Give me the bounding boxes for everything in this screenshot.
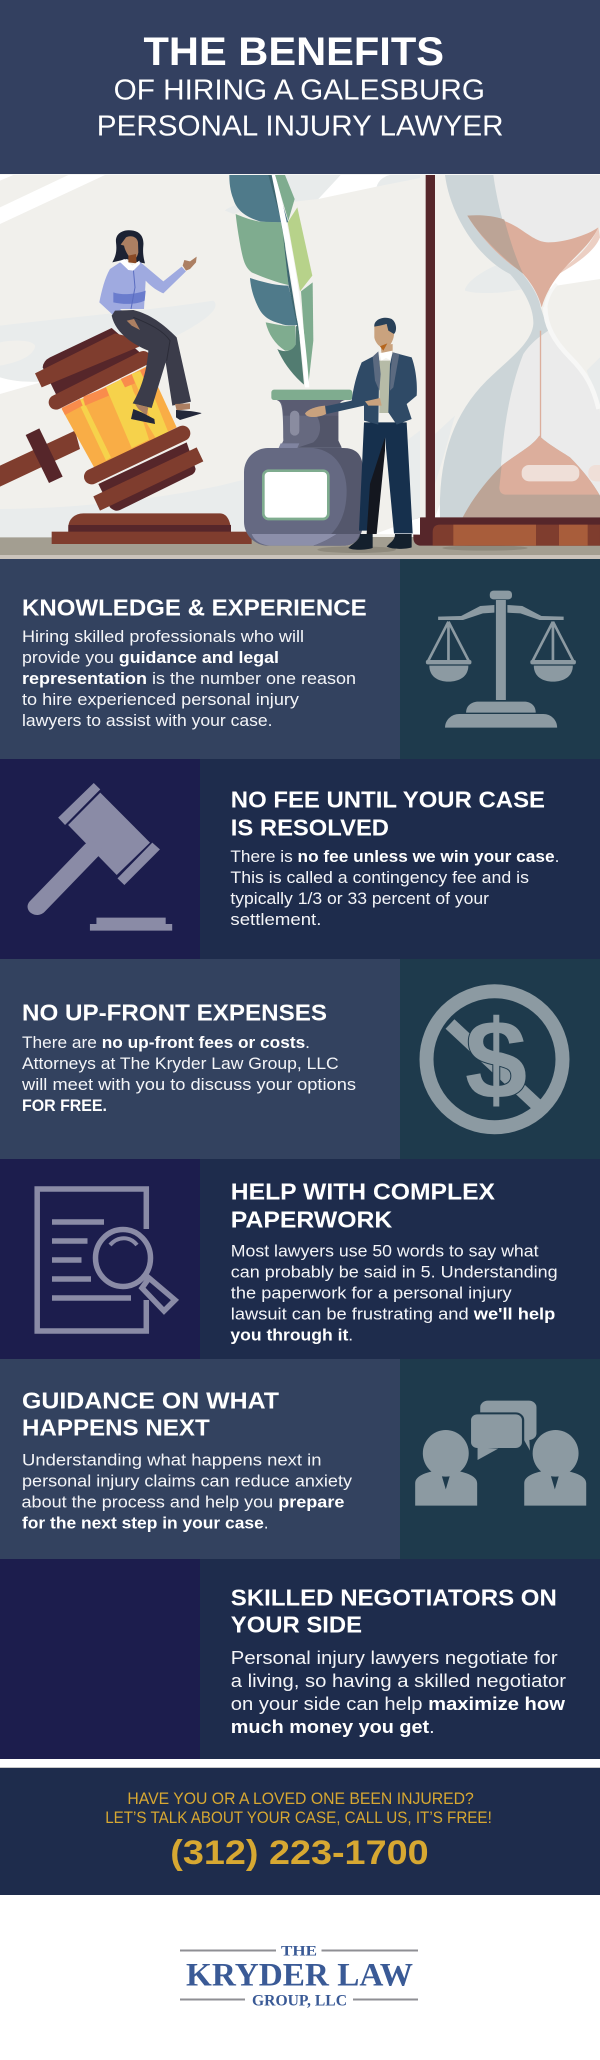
icon: document with magnifier (37, 1189, 175, 1331)
call to action text: LET’S TALK ABOUT YOUR CASE, CALL US, IT’S FREE! (105, 1808, 492, 1827)
background shapes behind feather (220, 175, 420, 537)
hero illustration (0, 174, 600, 559)
body text: for the next step in your case . (22, 1514, 269, 1532)
logo: The Kryder Law Group (180, 1944, 418, 2009)
call to action band (0, 1767, 600, 1895)
body text: Understanding what happens next in (22, 1451, 322, 1469)
feather quill (229, 175, 313, 387)
title: THE BENEFITS (144, 30, 444, 74)
ground (0, 537, 600, 559)
body text: about the process and help you prepare (22, 1493, 344, 1511)
body text: provide you guidance and legal (22, 649, 279, 667)
heading: SKILLED NEGOTIATORS ON (231, 1584, 557, 1610)
ink bottle (244, 390, 363, 546)
heading: IS RESOLVED (231, 814, 389, 840)
heading: HELP WITH COMPLEX (231, 1178, 495, 1204)
heading: NO FEE UNTIL YOUR CASE (231, 786, 545, 812)
body text: you through it . (230, 1327, 353, 1345)
body text (230, 1243, 558, 1345)
heading: NO UP-FRONT EXPENSES (22, 999, 327, 1025)
body text: the paperwork for a personal injury (231, 1285, 513, 1303)
panel: knowledge and experience (0, 559, 600, 759)
man standing (305, 318, 417, 553)
body text: Attorneys at The Kryder Law Group, LLC (22, 1055, 339, 1073)
body text: FOR FREE. (22, 1097, 107, 1115)
heading (231, 1584, 557, 1638)
body text: will meet with you to discuss your options (21, 1076, 356, 1094)
hourglass base (442, 545, 528, 551)
panel: skilled negotiators (0, 1559, 600, 1759)
body text: settlement. (230, 911, 321, 929)
body text: on your side can help maximize how (231, 1694, 566, 1714)
panel: no up-front expenses (0, 959, 600, 1159)
heading: PAPERWORK (231, 1207, 392, 1233)
icon: gavel (37, 783, 172, 931)
body text: There are no up-front fees or costs . (22, 1034, 310, 1052)
heading: YOUR SIDE (231, 1612, 362, 1638)
body text: Most lawyers use 50 words to say what (231, 1243, 539, 1261)
icon: two people talking (415, 1401, 586, 1506)
panel: complex paperwork (0, 1159, 600, 1359)
sand (553, 227, 600, 277)
gavel (0, 328, 252, 544)
logo: The Kryder Law Group: KRYDER LAW (186, 1958, 413, 1994)
heading (231, 786, 545, 840)
subtitle line 2: PERSONAL INJURY LAWYER (97, 111, 504, 143)
panel: guidance on what happens next (0, 1359, 600, 1559)
hourglass (413, 175, 600, 551)
logo: The Kryder Law Group: THE (281, 1944, 317, 1960)
heading: KNOWLEDGE & EXPERIENCE (22, 595, 367, 621)
body text: There is no fee unless we win your case . (230, 848, 559, 866)
icon: no money: $ (465, 997, 527, 1122)
body text: personal injury claims can reduce anxiety (22, 1472, 353, 1490)
body text: Hiring skilled professionals who will (22, 628, 304, 646)
body text: lawsuit can be frustrating and we'll help (231, 1306, 555, 1324)
sound block (68, 513, 231, 532)
subtitle line 1: OF HIRING A GALESBURG (114, 74, 485, 106)
body text (22, 628, 356, 730)
body text: a living, so having a skilled negotiator (231, 1671, 566, 1691)
body text: typically 1/3 or 33 percent of your (230, 890, 490, 908)
header banner (0, 0, 600, 174)
call to action text (105, 1789, 492, 1827)
body text: This is called a contingency fee and is (230, 869, 529, 887)
heading (231, 1178, 495, 1233)
phone number: (312) 223-1700 (170, 1834, 429, 1872)
heading (22, 1388, 280, 1441)
heading: GUIDANCE ON WHAT (22, 1388, 280, 1414)
body text (22, 1451, 353, 1532)
background shapes behind gavel (0, 175, 220, 537)
body text: Personal injury lawyers negotiate for (231, 1648, 558, 1668)
icon: scales of justice (426, 591, 576, 728)
panel: no fee until resolved (0, 759, 600, 959)
call to action text: HAVE YOU OR A LOVED ONE BEEN INJURED? (127, 1789, 474, 1808)
woman sitting on gavel (99, 230, 202, 424)
body text: representation is the number one reason (22, 670, 356, 688)
body text: to hire experienced personal injury (22, 691, 300, 709)
body text: can probably be said in 5. Understanding (231, 1264, 558, 1282)
body text (21, 1034, 356, 1115)
heading: HAPPENS NEXT (22, 1415, 210, 1441)
body text: lawyers to assist with your case. (22, 712, 272, 730)
logo: The Kryder Law Group: GROUP, LLC (252, 1992, 347, 2009)
icon: no money (426, 991, 562, 1127)
body text: much money you get . (231, 1717, 435, 1737)
body text (231, 1648, 566, 1737)
body text (230, 848, 559, 929)
